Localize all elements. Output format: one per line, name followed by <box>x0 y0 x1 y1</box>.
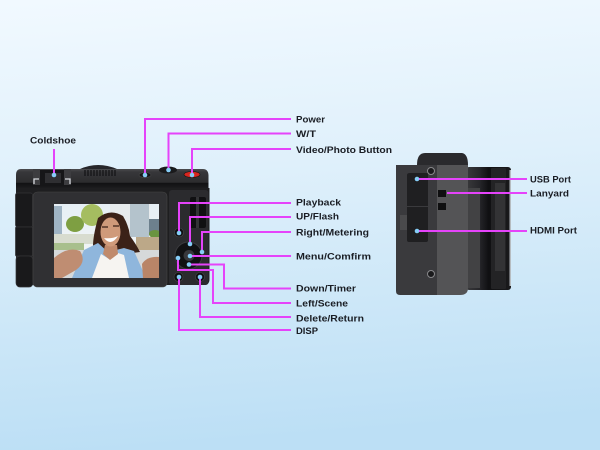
cold shoe <box>33 169 71 186</box>
labels: Right/Metering <box>296 228 369 238</box>
labels: Playback <box>296 198 342 208</box>
lanyard holes <box>438 190 446 197</box>
hinge <box>16 193 33 287</box>
t-shirt <box>92 253 129 278</box>
body <box>396 165 437 295</box>
labels: HDMI Port <box>530 226 578 236</box>
camera back view <box>16 165 210 287</box>
leader lines <box>54 119 527 330</box>
delete button <box>196 272 204 282</box>
selfie photo <box>54 204 161 278</box>
neck <box>103 245 118 260</box>
side tab <box>400 215 407 230</box>
labels: DISP <box>296 326 319 337</box>
labels: Left/Scene <box>296 298 348 310</box>
speaker grille <box>85 170 115 176</box>
labels: Down/Timer <box>296 284 356 294</box>
top plate <box>16 169 208 188</box>
zoom dome <box>80 165 117 169</box>
labels: Power <box>296 114 325 126</box>
playback button <box>174 228 184 237</box>
body shadow <box>468 188 480 288</box>
labels: Delete/Return <box>296 314 364 324</box>
port door <box>407 173 428 206</box>
labels: Lanyard <box>530 188 569 200</box>
screws <box>428 168 434 174</box>
labels: USB Port <box>530 174 572 186</box>
disp button <box>174 272 183 282</box>
main body <box>16 188 210 285</box>
labels: W/T <box>296 129 316 140</box>
camera side view <box>396 153 511 295</box>
labels: UP/Flash <box>296 212 339 222</box>
power button <box>139 172 151 178</box>
labels: Video/Photo Button <box>296 145 392 156</box>
video button <box>184 172 200 178</box>
d-pad <box>175 242 202 269</box>
labels: Menu/Comfirm <box>296 252 371 262</box>
arms <box>54 250 83 278</box>
labels <box>30 114 578 337</box>
connector dots <box>52 168 419 279</box>
zoom wheel <box>159 166 177 174</box>
screen bezel <box>33 192 167 287</box>
body light panel <box>437 165 480 295</box>
shirt <box>72 243 146 278</box>
grip <box>417 153 468 165</box>
control panel <box>169 190 208 285</box>
face <box>100 218 120 246</box>
labels: Coldshoe <box>30 136 76 146</box>
lens <box>466 167 511 290</box>
hair <box>93 212 140 254</box>
thumb grip <box>190 197 206 228</box>
